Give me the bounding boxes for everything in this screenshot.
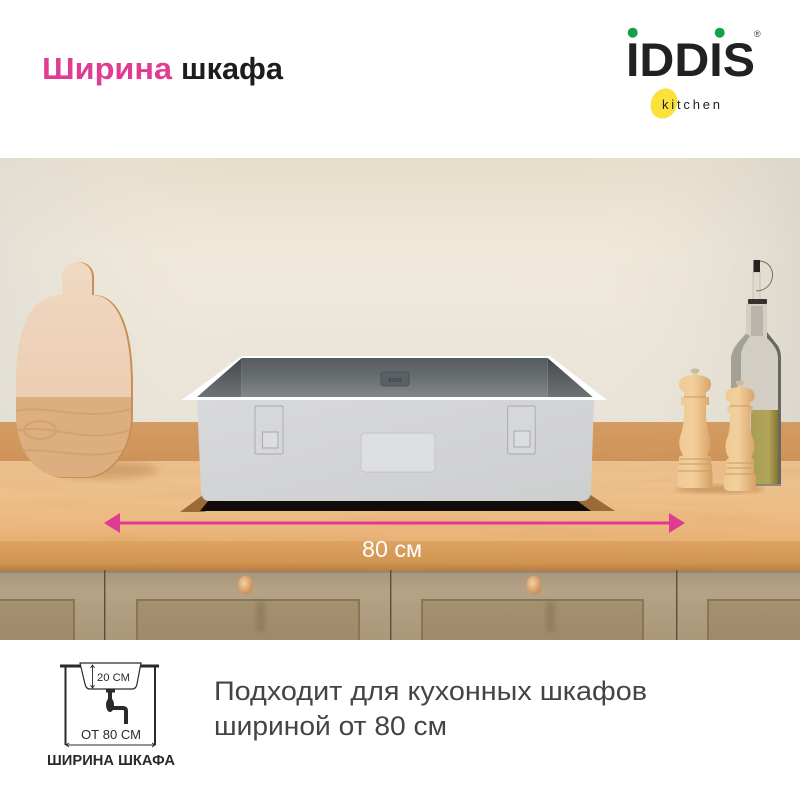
small mill rings <box>725 406 755 474</box>
dimension label: 80 см <box>362 536 422 562</box>
description text <box>214 676 647 741</box>
sink bowl outline <box>80 663 141 689</box>
sink <box>180 356 615 512</box>
board grain <box>12 408 135 455</box>
knob shadows <box>256 602 555 632</box>
drain overflow <box>381 372 409 386</box>
right clip <box>508 406 535 454</box>
title: Ширина <box>42 51 173 86</box>
cutting board <box>10 255 158 482</box>
kitchen label: kitchen <box>662 97 720 112</box>
sink back wall <box>242 358 548 397</box>
mill shadows <box>676 485 764 493</box>
wooden bottom <box>16 397 131 477</box>
pourer wire <box>756 261 772 291</box>
small mill knob <box>736 380 744 386</box>
board shadow <box>58 462 158 478</box>
left knob <box>238 576 253 594</box>
logo dots <box>628 28 725 38</box>
width arrow <box>66 743 155 747</box>
photo: kitchen scene <box>0 158 800 644</box>
description text: Подходит для кухонных шкафов <box>214 676 647 706</box>
icon caption: ШИРИНА ШКАФА <box>47 753 176 769</box>
cutout hole <box>200 500 591 511</box>
bottle upper glass <box>751 306 763 336</box>
counter front edge <box>0 541 800 571</box>
right knob <box>526 576 542 594</box>
pepper mills <box>676 368 764 493</box>
sink left wall <box>197 358 242 397</box>
cabinet dividers <box>104 570 677 640</box>
title: шкафа <box>181 51 284 86</box>
width label: ОТ 80 СМ <box>81 728 141 742</box>
sink outer body <box>197 400 594 501</box>
wood grain <box>0 422 800 571</box>
cutout hole sides <box>180 494 615 512</box>
oil bottle <box>731 260 781 486</box>
logo: IDDIS kitchen <box>626 28 761 123</box>
center label plate <box>361 433 435 472</box>
large mill rings <box>678 397 712 471</box>
dimension arrow <box>104 513 685 533</box>
oil <box>751 410 780 484</box>
logo wordmark: IDDIS <box>626 33 755 86</box>
yellow blob <box>646 84 682 123</box>
wall <box>0 158 800 423</box>
countertop <box>0 461 800 542</box>
pourer spout <box>753 272 760 300</box>
description text: шириной от 80 см <box>214 711 447 741</box>
cabinet sides <box>64 667 156 745</box>
sink right wall <box>548 358 593 397</box>
bottle glass <box>731 304 781 484</box>
sink rim <box>182 356 607 400</box>
drain overflow: IDDIS <box>388 378 402 384</box>
bottle cap <box>748 299 767 304</box>
left clip <box>255 406 283 454</box>
large mill knob <box>690 368 700 374</box>
title <box>42 51 284 86</box>
icon: sink and cabinet diagram <box>47 663 176 769</box>
siphon <box>110 689 126 724</box>
backsplash <box>0 422 800 462</box>
large pepper mill <box>678 369 712 488</box>
cabinet door panels <box>0 600 800 644</box>
cabinets <box>0 570 800 644</box>
registered mark: ® <box>754 29 761 39</box>
bottle right edge <box>767 332 781 485</box>
painted top <box>16 262 131 397</box>
board edge <box>18 262 133 478</box>
cabinet top <box>60 664 159 668</box>
height arrow <box>90 665 94 688</box>
height label: 20 СМ <box>97 672 130 684</box>
small pepper mill <box>724 381 756 491</box>
